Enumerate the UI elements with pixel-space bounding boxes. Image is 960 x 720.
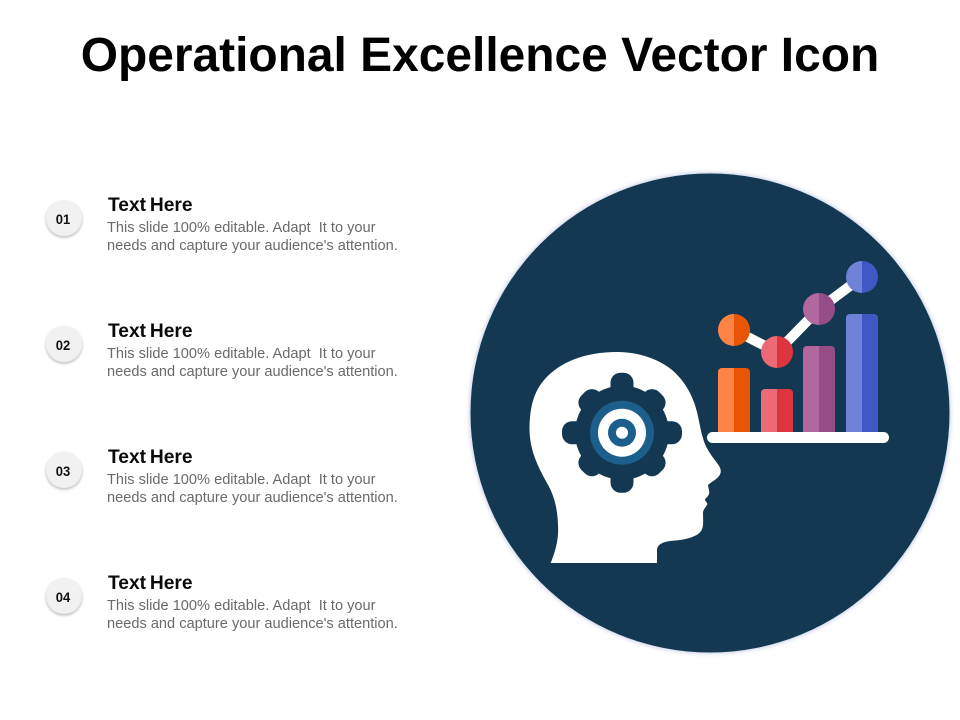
badge 01: [46, 200, 82, 238]
item 01 text: [107, 195, 398, 254]
item 03 text: Text Here: [108, 447, 193, 468]
chart: point blue: [846, 261, 878, 293]
item 04 text: [107, 573, 398, 632]
title: Operational Excellence Vector Icon: [81, 29, 879, 82]
item 02 text: needs and capture your audience's attention.: [107, 364, 398, 380]
badge 04: 04: [56, 589, 70, 605]
item 01 text: This slide 100% editable. Adapt It to your: [107, 220, 376, 236]
icon: head silhouette: [530, 352, 721, 563]
chart: baseline: [707, 432, 889, 443]
chart: point purple: [803, 293, 835, 325]
chart: bar blue: [846, 314, 878, 432]
panel: dark circle: [470, 172, 950, 654]
item 03 text: [107, 447, 398, 506]
item 02 text: Text Here: [108, 321, 193, 342]
item 04 text: This slide 100% editable. Adapt It to your: [107, 598, 376, 614]
badge 03: [46, 452, 82, 490]
badge 01: 01: [56, 211, 70, 227]
item 04 text: Text Here: [108, 573, 193, 594]
item 03 text: This slide 100% editable. Adapt It to your: [107, 472, 376, 488]
chart: bar orange: [718, 368, 750, 432]
item 01 text: needs and capture your audience's attention.: [107, 238, 398, 254]
item 01 text: Text Here: [108, 195, 193, 216]
icon: gear: [562, 373, 682, 493]
chart: point orange: [718, 314, 750, 346]
chart: point red: [761, 336, 793, 368]
chart: bar purple: [803, 346, 835, 432]
chart: trend line: [734, 277, 862, 352]
item 04 text: needs and capture your audience's attention.: [107, 616, 398, 632]
badge 02: 02: [56, 337, 70, 353]
badge 03: 03: [56, 463, 70, 479]
list item 04: [46, 573, 398, 632]
list item 02: [46, 321, 398, 380]
badge 04: [46, 578, 82, 616]
item 02 text: [107, 321, 398, 380]
list item 01: [46, 195, 398, 254]
badge 02: [46, 326, 82, 364]
list item 03: [46, 447, 398, 506]
item 02 text: This slide 100% editable. Adapt It to your: [107, 346, 376, 362]
item 03 text: needs and capture your audience's attention.: [107, 490, 398, 506]
chart: bar red: [761, 389, 793, 432]
